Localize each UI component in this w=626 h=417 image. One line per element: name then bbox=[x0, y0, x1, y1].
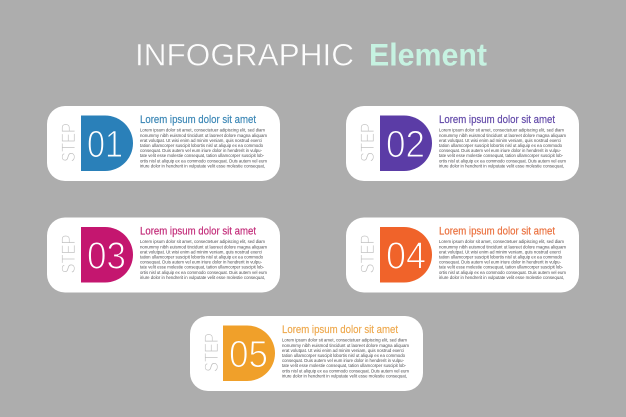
text block: step 02: nonummy nibh euismod tincidunt ut laoreet dolore magna aliquam bbox=[439, 133, 566, 139]
text block: step 03: ortis nisl ut aliquip ex ea commodo consequat. Duis autem vel eum bbox=[140, 270, 267, 276]
text block: step 03: consequat. Duis autem vel eum iriure dolor in hendrerit in vulpu- bbox=[140, 260, 262, 266]
title: Element bbox=[369, 36, 487, 72]
panel: step 04 bbox=[346, 218, 579, 292]
badge: 03: 03 bbox=[87, 236, 126, 278]
badge: 04: 04 bbox=[386, 236, 426, 278]
text block: step 02: Lorem ipsum dolor sit amet, consectetuer adipiscing elit, sed diam bbox=[439, 128, 564, 134]
panel: step 02 bbox=[346, 106, 579, 181]
text block: step 05: nonummy nibh euismod tincidunt ut laoreet dolore magna aliquam bbox=[282, 343, 409, 349]
text block: step 02 bbox=[439, 128, 566, 169]
label: step 01: STEP bbox=[59, 123, 80, 162]
text block: step 01: tate velit esse molestie consequat, tation ullamcorper suscipit lob- bbox=[140, 153, 264, 159]
text block: step 05: Lorem ipsum dolor sit amet, consectetuer adipiscing elit, sed diam bbox=[282, 338, 407, 344]
badge: 01 bbox=[81, 116, 133, 171]
label: step 04: STEP bbox=[358, 234, 379, 274]
heading: step 01: Lorem ipsum dolor sit amet bbox=[140, 114, 256, 126]
badge: 01: 01 bbox=[87, 124, 123, 166]
text block: step 02: iriure dolor in hendrerit in vulputate velit esse molestie consequat, bbox=[439, 163, 564, 169]
text block: step 04: nonummy nibh euismod tincidunt ut laoreet dolore magna aliquam bbox=[439, 244, 566, 250]
text block: step 05: tation ullamcorper suscipit lobortis nisl ut aliquip ex ea commodo bbox=[282, 353, 405, 359]
text block: step 05: ortis nisl ut aliquip ex ea commodo consequat. Duis autem vel eum bbox=[282, 368, 409, 374]
text block: step 01: nonummy nibh euismod tincidunt ut laoreet dolore magna aliquam bbox=[140, 133, 267, 139]
text block: step 03: nonummy nibh euismod tincidunt ut laoreet dolore magna aliquam bbox=[140, 244, 267, 250]
text block: step 03: iriure dolor in hendrerit in vulputate velit esse molestie consequat, bbox=[140, 275, 265, 281]
text block: step 03: erat volutpat. Ut wisi enim ad minim veniam, quis nostrud exerci bbox=[140, 249, 262, 255]
badge: 04 bbox=[380, 227, 432, 282]
text block: step 01: Lorem ipsum dolor sit amet, consectetuer adipiscing elit, sed diam bbox=[140, 128, 265, 134]
text block: step 04: tate velit esse molestie consequat, tation ullamcorper suscipit lob- bbox=[439, 265, 563, 271]
text block: step 04: iriure dolor in hendrerit in vulputate velit esse molestie consequat, bbox=[439, 275, 564, 281]
text block: step 05: iriure dolor in hendrerit in vulputate velit esse molestie consequat, bbox=[282, 373, 407, 379]
text block: step 04: consequat. Duis autem vel eum iriure dolor in hendrerit in vulpu- bbox=[439, 260, 561, 266]
heading: step 05: Lorem ipsum dolor sit amet bbox=[282, 324, 398, 336]
text block: step 01: ortis nisl ut aliquip ex ea commodo consequat. Duis autem vel eum bbox=[140, 158, 267, 164]
badge: 05: 05 bbox=[229, 334, 268, 376]
title bbox=[135, 36, 487, 72]
badge: 05 bbox=[223, 326, 275, 381]
text block: step 05 bbox=[282, 338, 409, 379]
badge: 03 bbox=[81, 227, 133, 282]
text block: step 01: tation ullamcorper suscipit lobortis nisl ut aliquip ex ea commodo bbox=[140, 143, 263, 149]
text block: step 03: tate velit esse molestie consequat, tation ullamcorper suscipit lob- bbox=[140, 265, 264, 271]
label: step 03: STEP bbox=[59, 234, 80, 274]
text block: step 01: iriure dolor in hendrerit in vulputate velit esse molestie consequat, bbox=[140, 163, 265, 169]
panel: step 01 bbox=[47, 106, 280, 181]
text block: step 03: tation ullamcorper suscipit lobortis nisl ut aliquip ex ea commodo bbox=[140, 254, 263, 260]
panel: step 03 bbox=[47, 218, 280, 292]
heading: step 03: Lorem ipsum dolor sit amet bbox=[140, 226, 256, 238]
text block: step 05: erat volutpat. Ut wisi enim ad minim veniam, quis nostrud exerci bbox=[282, 348, 404, 354]
heading: step 02: Lorem ipsum dolor sit amet bbox=[439, 114, 555, 126]
text block: step 03: Lorem ipsum dolor sit amet, consectetuer adipiscing elit, sed diam bbox=[140, 239, 265, 245]
label: step 05: STEP bbox=[202, 333, 223, 372]
badge: 02: 02 bbox=[386, 124, 425, 166]
text block: step 04: erat volutpat. Ut wisi enim ad minim veniam, quis nostrud exerci bbox=[439, 249, 561, 255]
text block: step 04 bbox=[439, 239, 566, 281]
text block: step 02: erat volutpat. Ut wisi enim ad minim veniam, quis nostrud exerci bbox=[439, 138, 561, 144]
text block: step 01: consequat. Duis autem vel eum iriure dolor in hendrerit in vulpu- bbox=[140, 148, 262, 154]
text block: step 02: tation ullamcorper suscipit lobortis nisl ut aliquip ex ea commodo bbox=[439, 143, 562, 149]
text block: step 03 bbox=[140, 239, 267, 281]
heading: step 04: Lorem ipsum dolor sit amet bbox=[439, 226, 555, 238]
text block: step 04: ortis nisl ut aliquip ex ea commodo consequat. Duis autem vel eum bbox=[439, 270, 566, 276]
label: step 02: STEP bbox=[358, 123, 379, 162]
text block: step 04: tation ullamcorper suscipit lobortis nisl ut aliquip ex ea commodo bbox=[439, 254, 562, 260]
text block: step 02: ortis nisl ut aliquip ex ea commodo consequat. Duis autem vel eum bbox=[439, 158, 566, 164]
text block: step 05: tate velit esse molestie consequat, tation ullamcorper suscipit lob- bbox=[282, 363, 406, 369]
text block: step 05: consequat. Duis autem vel eum iriure dolor in hendrerit in vulpu- bbox=[282, 358, 404, 364]
text block: step 04: Lorem ipsum dolor sit amet, consectetuer adipiscing elit, sed diam bbox=[439, 239, 564, 245]
text block: step 02: consequat. Duis autem vel eum iriure dolor in hendrerit in vulpu- bbox=[439, 148, 561, 154]
text block: step 02: tate velit esse molestie consequat, tation ullamcorper suscipit lob- bbox=[439, 153, 563, 159]
text block: step 01 bbox=[140, 128, 267, 169]
title: INFOGRAPHIC bbox=[135, 36, 354, 72]
panel: step 05 bbox=[190, 316, 423, 391]
badge: 02 bbox=[380, 116, 432, 171]
text block: step 01: erat volutpat. Ut wisi enim ad minim veniam, quis nostrud exerci bbox=[140, 138, 262, 144]
